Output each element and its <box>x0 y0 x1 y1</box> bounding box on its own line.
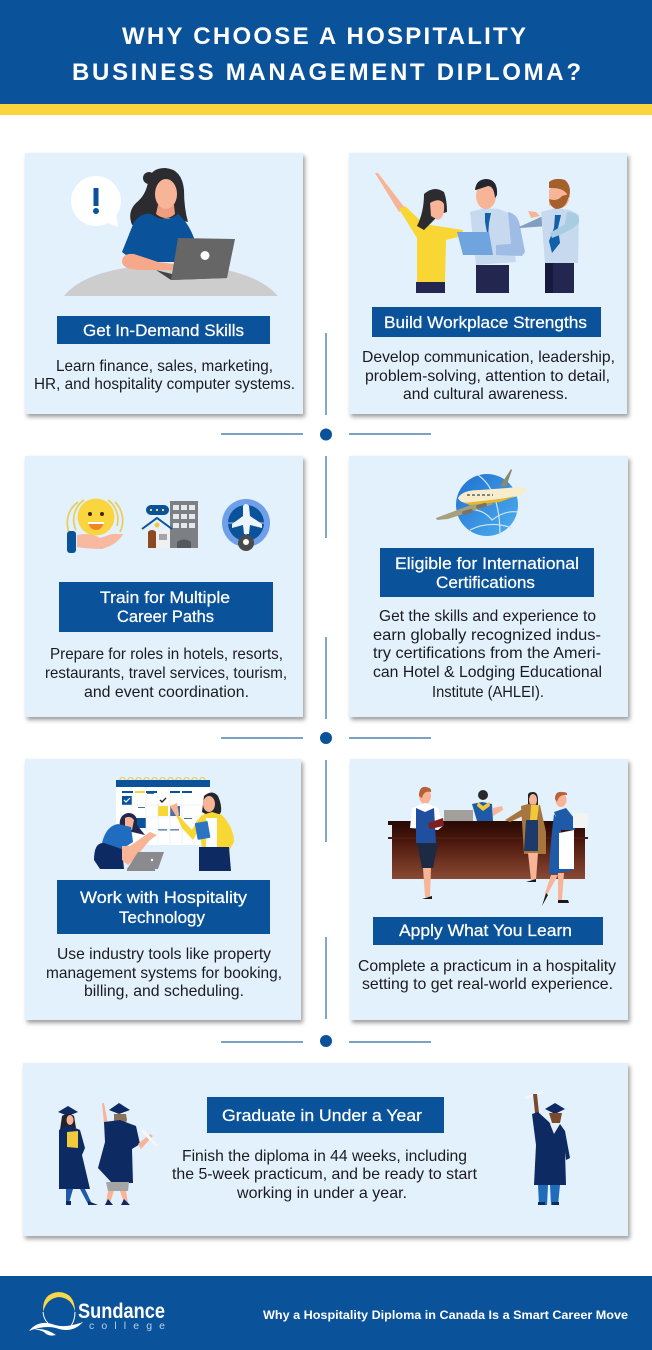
body text: restaurants, travel services, tourism, <box>45 665 287 682</box>
body text: management systems for booking, <box>46 965 282 982</box>
panel: graduate in under a year <box>23 1063 628 1236</box>
panel: international certifications <box>349 456 628 717</box>
title: BUSINESS MANAGEMENT DIPLOMA? <box>72 59 581 86</box>
icon: woman at laptop with alert bubble <box>64 168 278 296</box>
logo: Sundance College: college <box>89 1320 165 1332</box>
heading: Graduate in Under a Year <box>222 1107 423 1125</box>
heading <box>380 548 594 597</box>
body text: Complete a practicum in a hospitality <box>358 958 616 975</box>
heading: Train for Multiple <box>100 589 230 607</box>
heading: Work with Hospitality <box>80 889 248 907</box>
logo: Sundance College <box>29 1292 165 1336</box>
body text <box>373 608 602 701</box>
body text <box>362 349 615 403</box>
heading <box>372 307 601 337</box>
body text: Develop communication, leadership, <box>362 349 615 366</box>
icon: globe with plane and pin <box>222 499 270 551</box>
body text <box>34 358 295 393</box>
body text <box>46 946 282 1000</box>
logo: Sundance College: Sundance <box>78 1300 165 1323</box>
panel: build workplace strengths <box>349 153 627 414</box>
body text: Institute (AHLEI). <box>432 684 544 701</box>
panel: hospitality technology <box>25 759 301 1020</box>
heading: Build Workplace Strengths <box>384 314 587 332</box>
body text: Get the skills and experience to <box>379 608 596 625</box>
heading: Technology <box>119 909 206 927</box>
icon: three colleagues <box>375 173 579 293</box>
icon: hotel reception staff at desk <box>388 787 588 906</box>
icon: smiley on hand <box>67 498 123 553</box>
panel: apply what you learn <box>350 759 628 1020</box>
icon: plane over globe <box>436 469 526 536</box>
heading <box>57 880 270 934</box>
body text: can Hotel & Lodging Educational <box>373 664 602 681</box>
heading: Eligible for International <box>395 555 579 573</box>
heading <box>207 1097 444 1133</box>
body text <box>45 646 287 701</box>
panel: get in-demand skills <box>25 153 303 414</box>
heading: Certifications <box>436 574 535 592</box>
body text: and cultural awareness. <box>403 386 568 403</box>
title: WHY CHOOSE A HOSPITALITY <box>122 23 526 50</box>
body text: working in under a year. <box>236 1185 407 1202</box>
body text: problem-solving, attention to detail, <box>365 368 610 385</box>
heading <box>373 917 603 945</box>
body text <box>172 1148 478 1202</box>
body text: the 5-week practicum, and be ready to start <box>172 1166 478 1183</box>
title <box>72 23 581 86</box>
body text: setting to get real-world experience. <box>362 976 613 993</box>
icon: graduate with raised diploma <box>525 1092 570 1205</box>
body text: Prepare for roles in hotels, resorts, <box>50 646 283 663</box>
heading: Get In-Demand Skills <box>83 322 244 340</box>
header banner <box>0 0 652 115</box>
body text: billing, and scheduling. <box>84 983 244 1000</box>
panel: multiple career paths <box>25 456 303 717</box>
center divider lines and dots <box>221 333 431 1047</box>
heading <box>57 316 270 344</box>
icon: two graduates <box>58 1103 157 1205</box>
tagline: Why a Hospitality Diploma in Canada Is a Smart Career Move <box>263 1308 628 1322</box>
body text: try certifications from the Ameri- <box>373 645 601 662</box>
body text: and event coordination. <box>84 684 249 701</box>
body text <box>358 958 616 993</box>
heading: Career Paths <box>117 608 214 626</box>
icon: calendar with two women <box>94 778 234 871</box>
heading: Apply What You Learn <box>399 922 572 940</box>
heading <box>59 582 273 632</box>
body text: earn globally recognized indus- <box>373 627 601 644</box>
footer banner <box>0 1276 652 1350</box>
body text: Finish the diploma in 44 weeks, including <box>182 1148 467 1165</box>
body text: Use industry tools like property <box>57 946 271 963</box>
icon: hotel and house <box>142 501 198 548</box>
body text: HR, and hospitality computer systems. <box>34 376 295 393</box>
body text: Learn finance, sales, marketing, <box>56 358 273 375</box>
